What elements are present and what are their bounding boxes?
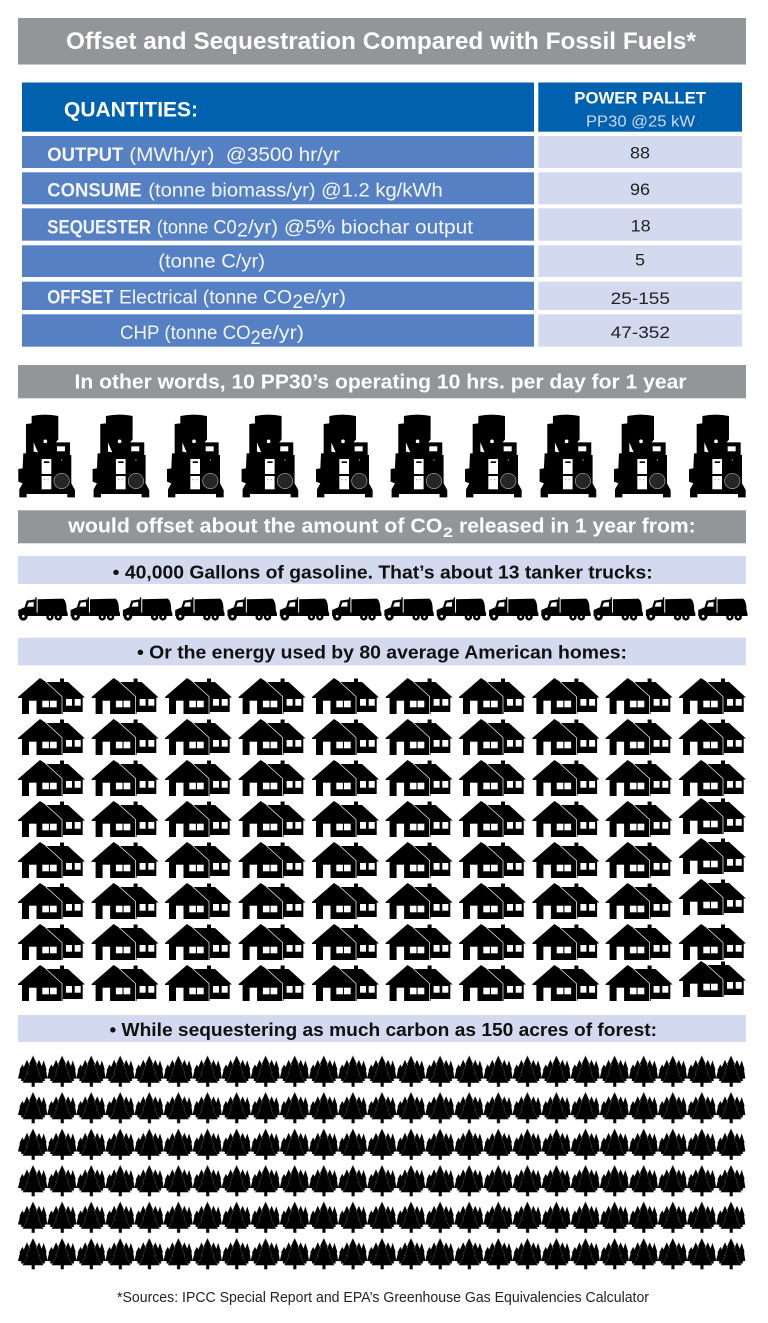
row: output [22, 136, 742, 168]
row: sequester carbon: 5 [635, 251, 645, 270]
heading: homes [18, 638, 746, 665]
icons: 14 tanker trucks [18, 597, 748, 621]
row: sequester: 18 [631, 217, 651, 236]
row: offset chp: e/yr) [261, 323, 304, 344]
banner: would offset [18, 510, 746, 543]
banner: would offset: would offset about the amount of CO [67, 515, 442, 537]
icons: 10 power pallet units [18, 415, 746, 497]
banner: in other words: In other words, 10 PP30’s operating 10 hrs. per day for 1 year [74, 371, 687, 393]
footnote: sources: *Sources: IPCC Special Report and EPA’s Greenhouse Gas Equivalencies Calculator [117, 1289, 649, 1306]
heading: gasoline [18, 556, 746, 584]
row: consume: CONSUME [47, 181, 142, 202]
row: sequester [22, 208, 742, 242]
table header: quantities [22, 82, 534, 132]
table header: power pallet: PP30 @25 kW [586, 114, 696, 131]
row: sequester: /yr) @5% biochar output [248, 217, 474, 238]
row: sequester: (tonne C0 [157, 217, 237, 238]
row: sequester carbon [22, 245, 742, 277]
row: offset electrical: OFFSET [47, 287, 114, 308]
icons: rows of forest trees [18, 1056, 745, 1269]
row: consume: (tonne biomass/yr) @1.2 kg/kWh [148, 181, 443, 202]
row: sequester carbon: (tonne C/yr) [158, 252, 265, 273]
row: sequester: 2 [237, 221, 248, 242]
table header: quantities: QUANTITIES: [64, 98, 198, 122]
row: consume [22, 172, 742, 204]
row: offset chp: CHP (tonne CO [120, 323, 251, 344]
row: offset chp: 2 [250, 328, 261, 349]
panel: quantities table [22, 82, 742, 349]
row: offset electrical [22, 282, 742, 313]
row: output: OUTPUT [47, 145, 124, 166]
row: offset chp [22, 314, 742, 349]
row: sequester: SEQUESTER [47, 217, 151, 238]
row: output: (MWh/yr) @3500 hr/yr [129, 145, 341, 166]
table header: power pallet: POWER PALLET [574, 88, 707, 107]
banner: in other words [18, 365, 746, 398]
row: offset electrical: 25-155 [611, 289, 670, 308]
table header: power pallet [538, 82, 742, 132]
row: offset chp: 47-352 [611, 323, 670, 342]
row: offset electrical: Electrical (tonne CO [119, 287, 292, 308]
row: output: 88 [630, 143, 650, 162]
row: offset electrical: 2 [292, 292, 303, 313]
heading: forest: • While sequestering as much carbon as 150 acres of forest: [110, 1019, 657, 1040]
title banner [18, 18, 746, 64]
row: offset electrical: e/yr) [303, 287, 346, 308]
title banner: Offset and Sequestration Compared with Fossil Fuels* [66, 28, 696, 55]
icons: 80 houses [18, 678, 746, 1001]
heading: gasoline: • 40,000 Gallons of gasoline. That’s about 13 tanker trucks: [113, 561, 653, 582]
row: consume: 96 [630, 180, 650, 199]
heading: homes: • Or the energy used by 80 average American homes: [137, 641, 627, 662]
banner: would offset: released in 1 year from: [459, 515, 696, 537]
banner: would offset: 2 [443, 524, 453, 540]
heading: forest [18, 1015, 746, 1042]
